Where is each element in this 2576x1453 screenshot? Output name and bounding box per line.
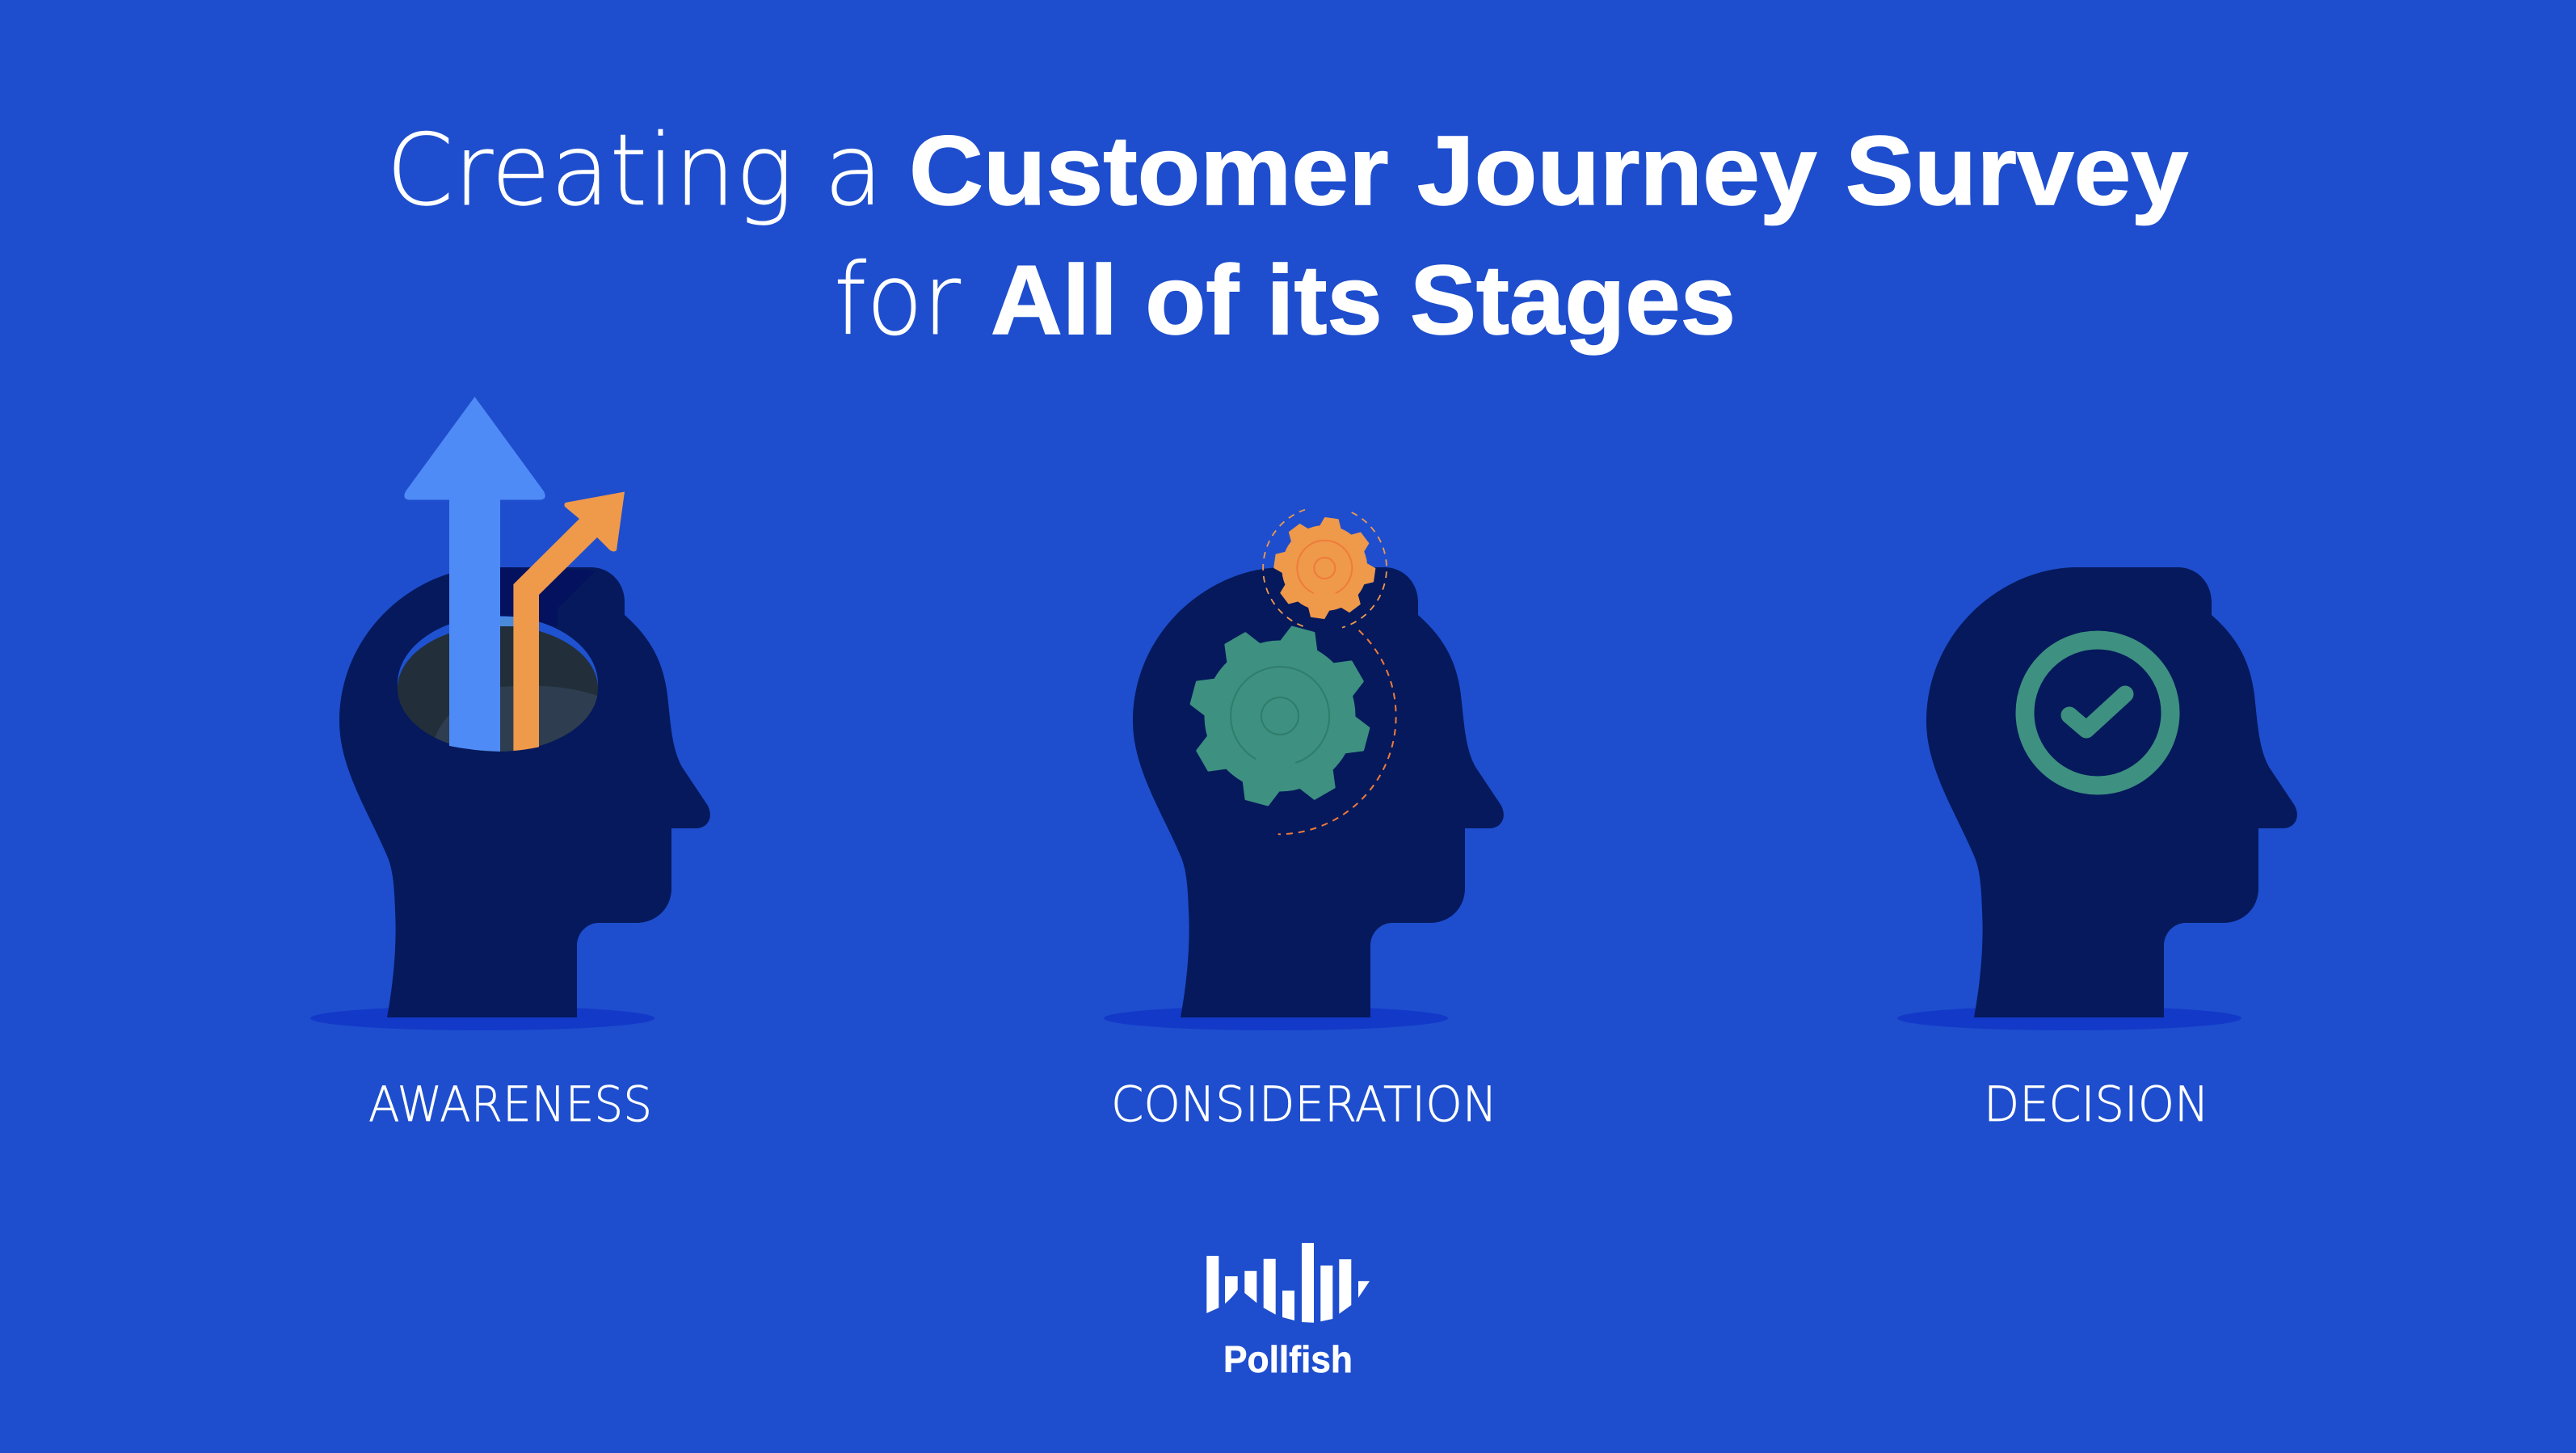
- icon: blue up arrow: [404, 397, 545, 752]
- title: [386, 113, 2188, 357]
- ground shadow: [310, 1006, 655, 1030]
- title line 1: Customer Journey Survey: [909, 116, 2188, 225]
- panel: decision: [1897, 567, 2297, 1030]
- icon: orange bent arrow: [513, 491, 625, 751]
- panel: awareness: [310, 397, 710, 1030]
- ground shadow: [1897, 1006, 2241, 1030]
- label: decision: DECISION: [1984, 1076, 2209, 1133]
- head silhouette: [1926, 567, 2297, 1017]
- dashed orbit: small gear: [1263, 510, 1387, 628]
- icon: check circle: [2025, 640, 2170, 785]
- logo mark: [1206, 1243, 1370, 1323]
- logo: Pollfish: [1206, 1243, 1370, 1380]
- title line 2: All of its Stages: [991, 245, 1736, 355]
- head silhouette: [339, 567, 710, 1017]
- opening in head: [398, 616, 602, 760]
- arrow shadow on head: [500, 567, 596, 626]
- title line 1: Creating a: [386, 113, 883, 228]
- title line 2: for: [834, 242, 962, 357]
- logo wordmark: Pollfish: [1223, 1338, 1353, 1380]
- label: consideration: CONSIDERATION: [1111, 1076, 1497, 1133]
- panel: consideration: [1104, 510, 1504, 1030]
- label: awareness: AWARENESS: [368, 1076, 652, 1133]
- icon: large teal gear: [1189, 625, 1370, 807]
- head silhouette: [1133, 567, 1504, 1017]
- dashed orbit: large gear: [1278, 630, 1396, 834]
- ground shadow: [1104, 1006, 1448, 1030]
- icon: small orange gear: [1274, 517, 1375, 619]
- title line 1: [386, 113, 2188, 228]
